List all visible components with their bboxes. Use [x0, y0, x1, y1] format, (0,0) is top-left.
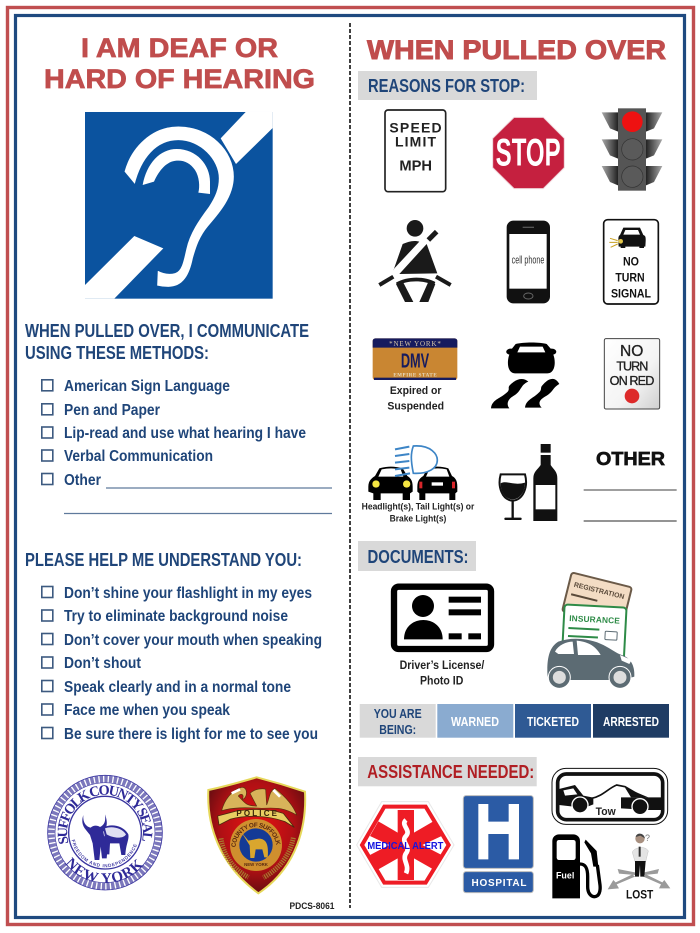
- status bar: you are being: TICKETED: [527, 714, 579, 729]
- heading: communication methods: [25, 320, 309, 363]
- icon: no turn on red sign: ON RED: [610, 374, 654, 388]
- icon: no turn on red sign: TURN: [616, 360, 648, 374]
- document code: PDCS-8061: [290, 900, 334, 911]
- icon: lost man with arrows: ?: [645, 833, 650, 843]
- title: I am deaf or hard of hearing: I AM DEAF OR: [81, 33, 278, 63]
- icon: tow truck sign: [552, 768, 668, 824]
- heading: reasons for stop: [358, 71, 537, 100]
- icon: headlight and tail light cars: [362, 446, 475, 524]
- icon: no turn on red sign: NO: [620, 343, 643, 360]
- checklist: communication methods: [42, 378, 332, 514]
- heading: documents: DOCUMENTS:: [368, 546, 468, 567]
- icon: registration, insurance and car: [547, 572, 634, 688]
- icon: medical alert: MEDICAL ALERT: [367, 841, 443, 852]
- icon: driver's license: Driver’s License/: [400, 658, 485, 672]
- icon: Suffolk County seal: FREEDOM AND INDEPENDENCE: [72, 840, 137, 868]
- checklist: help me understand: Face me when you speak: [64, 702, 230, 719]
- checklist: communication methods: Pen and Paper: [64, 402, 160, 419]
- icon: medical alert: [357, 802, 454, 887]
- heading: assistance needed: [358, 757, 537, 786]
- icon: stop sign: [493, 117, 564, 189]
- icon: Suffolk County seal: SUFFOLK COUNTY SEAL: [58, 785, 152, 844]
- heading: please help me understand you: PLEASE HELP ME UNDERSTAND YOU:: [25, 549, 302, 570]
- icon: Suffolk police shield: POLICE: [236, 809, 278, 818]
- icon: expired license plate: DMV: [401, 350, 429, 373]
- icon: cell phone: [507, 221, 550, 303]
- icon: tow truck sign: Tow: [596, 806, 616, 818]
- status bar: you are being: YOU ARE: [374, 706, 422, 721]
- icon: Suffolk County seal: NEW YORK: [65, 857, 144, 884]
- checklist: help me understand: Be sure there is light for me to see you: [64, 726, 318, 743]
- heading: communication methods: USING THESE METHODS:: [25, 342, 209, 363]
- icon: speed limit sign: SPEED: [389, 119, 442, 135]
- checklist: help me understand: Don’t shine your flashlight in my eyes: [64, 585, 312, 602]
- other label with blank lines: OTHER: [596, 448, 666, 469]
- icon: fuel pump: [552, 834, 600, 898]
- heading: communication methods: WHEN PULLED OVER, I COMMUNICATE: [25, 320, 309, 341]
- checklist: communication methods: American Sign Language: [64, 378, 230, 395]
- icon: hearing loss ear symbol: [85, 112, 273, 299]
- status bar: you are being: BEING:: [379, 722, 416, 737]
- icon: Suffolk police shield: COUNTY OF SUFFOLK: [231, 822, 280, 847]
- icon: driver's license: Photo ID: [420, 673, 464, 687]
- icon: registration, insurance and car: INSURANCE: [569, 613, 621, 626]
- icon: no turn signal sign: SIGNAL: [611, 286, 651, 300]
- icon: fuel pump: Fuel: [556, 870, 574, 880]
- icon: wine glass and bottle: [500, 444, 557, 521]
- icon: Suffolk police shield: NEW YORK: [244, 862, 269, 867]
- icon: lost man with arrows: [608, 833, 670, 901]
- icon: Suffolk police shield: [207, 776, 306, 894]
- checklist: communication methods: Other: [64, 472, 101, 489]
- icon: headlight and tail light cars: Headlight(s), Tail Light(s) or: [362, 501, 475, 511]
- heading: documents: [358, 541, 476, 571]
- icon: cell phone: cell phone: [512, 254, 544, 266]
- icon: expired license plate: [373, 338, 457, 412]
- icon: stop sign: STOP: [496, 131, 561, 175]
- icon: expired license plate: EMPIRE STATE: [393, 374, 437, 379]
- checklist: communication methods: Verbal Communication: [64, 448, 213, 465]
- icon: expired license plate: Expired or: [390, 385, 442, 397]
- checklist: help me understand: Speak clearly and in a normal tone: [64, 679, 291, 696]
- icon: speed limit sign: [385, 110, 446, 192]
- checklist: help me understand: Don’t shout: [64, 655, 142, 672]
- heading: assistance needed: ASSISTANCE NEEDED:: [367, 761, 534, 782]
- icon: Suffolk County seal: [47, 774, 163, 890]
- title: when pulled over: WHEN PULLED OVER: [367, 35, 666, 65]
- icon: expired license plate: *NEW YORK*: [389, 340, 441, 348]
- icon: hospital sign: HOSPITAL: [471, 878, 526, 889]
- status bar: you are being: [360, 704, 669, 738]
- icon: registration, insurance and car: REGISTRATION: [573, 582, 625, 601]
- icon: skidding car: [491, 342, 559, 408]
- status bar: you are being: ARRESTED: [603, 714, 659, 729]
- icon: hospital sign: [463, 796, 533, 893]
- title: I am deaf or hard of hearing: [44, 33, 315, 94]
- title: I am deaf or hard of hearing: HARD OF HEARING: [44, 64, 315, 94]
- checklist: help me understand: Try to eliminate background noise: [64, 608, 288, 625]
- heading: reasons for stop: REASONS FOR STOP:: [368, 75, 525, 96]
- status bar: you are being: WARNED: [451, 714, 499, 729]
- icon: headlight and tail light cars: Brake Light(s): [390, 514, 446, 524]
- checklist: communication methods: Lip-read and use what hearing I have: [64, 425, 306, 442]
- icon: traffic light: [602, 108, 662, 191]
- icon: no turn signal sign: [604, 220, 658, 304]
- icon: expired license plate: Suspended: [387, 400, 444, 412]
- icon: speed limit sign: LIMIT: [395, 134, 436, 150]
- icon: speed limit sign: MPH: [399, 159, 432, 175]
- other label with blank lines: [584, 448, 677, 521]
- icon: seat belt: [379, 220, 451, 302]
- icon: no turn signal sign: TURN: [615, 271, 645, 285]
- icon: driver's license: [394, 587, 491, 687]
- icon: lost man with arrows: LOST: [626, 887, 654, 901]
- checklist: help me understand: [42, 585, 322, 743]
- icon: no turn on red sign: [604, 339, 660, 409]
- icon: no turn signal sign: NO: [623, 255, 639, 269]
- checklist: help me understand: Don’t cover your mouth when speaking: [64, 632, 322, 649]
